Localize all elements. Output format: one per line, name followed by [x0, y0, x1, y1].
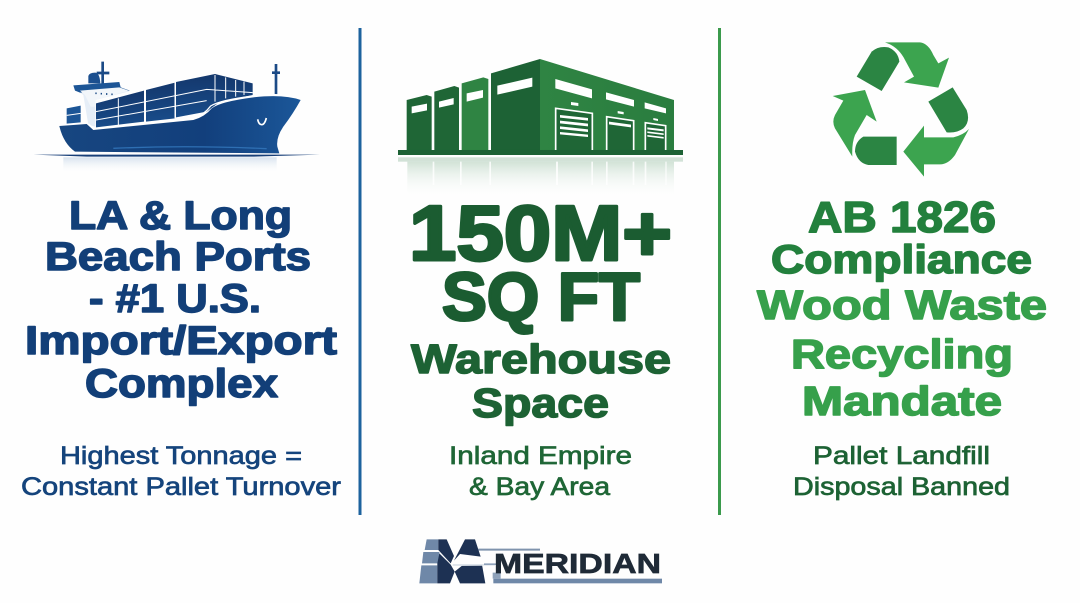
logo wordmark: MERIDIAN: [494, 548, 661, 579]
subtext: locations: [449, 442, 632, 501]
heading: LA & Long Beach Ports: Import/Export: [25, 319, 337, 363]
subtext: disposal: Disposal Banned: [793, 473, 1010, 501]
subtext: locations: & Bay Area: [469, 473, 610, 501]
heading: LA & Long Beach Ports: [25, 194, 337, 406]
subtext: tonnage: Constant Pallet Turnover: [21, 473, 341, 501]
panel: ports: [21, 62, 341, 501]
heading: 150M+ SQ FT: 150M+: [409, 189, 672, 277]
icon: recycling symbol: [833, 42, 969, 177]
heading: 150M+ SQ FT: SQ FT: [442, 259, 640, 335]
heading: LA & Long Beach Ports: LA & Long: [69, 194, 292, 238]
icon: warehouse: [398, 59, 683, 198]
panel: warehouse: [398, 59, 683, 501]
divider: blue: [358, 28, 362, 515]
logo: Meridian: [419, 539, 662, 583]
subtext: disposal: Pallet Landfill: [813, 442, 990, 470]
heading: LA & Long Beach Ports: Beach Ports: [45, 235, 311, 279]
heading: Wood Waste Recycling Mandate: Recycling: [791, 331, 1013, 377]
heading: Wood Waste Recycling Mandate: Wood Waste: [757, 282, 1047, 328]
subtext: disposal: [793, 442, 1010, 501]
divider: green: [718, 28, 721, 515]
subtext: tonnage: [21, 442, 341, 501]
subtext: locations: Inland Empire: [449, 442, 632, 470]
heading: Wood Waste Recycling Mandate: Mandate: [802, 378, 1002, 424]
heading: 150M+ SQ FT: [409, 189, 672, 335]
icon: container ship: [33, 62, 320, 173]
heading: LA & Long Beach Ports: - #1 U.S.: [89, 277, 261, 321]
panel: compliance: [757, 42, 1047, 501]
subtext: tonnage: Highest Tonnage =: [60, 442, 302, 470]
heading: Warehouse Space: [411, 336, 671, 426]
logo mark: [419, 539, 662, 583]
heading: AB 1826 Compliance: Compliance: [771, 238, 1032, 282]
heading: Wood Waste Recycling Mandate: [757, 282, 1047, 424]
heading: Warehouse Space: Warehouse: [411, 336, 671, 382]
heading: LA & Long Beach Ports: Complex: [85, 362, 278, 406]
heading: Warehouse Space: Space: [472, 380, 609, 426]
heading: AB 1826 Compliance: AB 1826: [808, 193, 996, 242]
heading: AB 1826 Compliance: [771, 193, 1032, 282]
